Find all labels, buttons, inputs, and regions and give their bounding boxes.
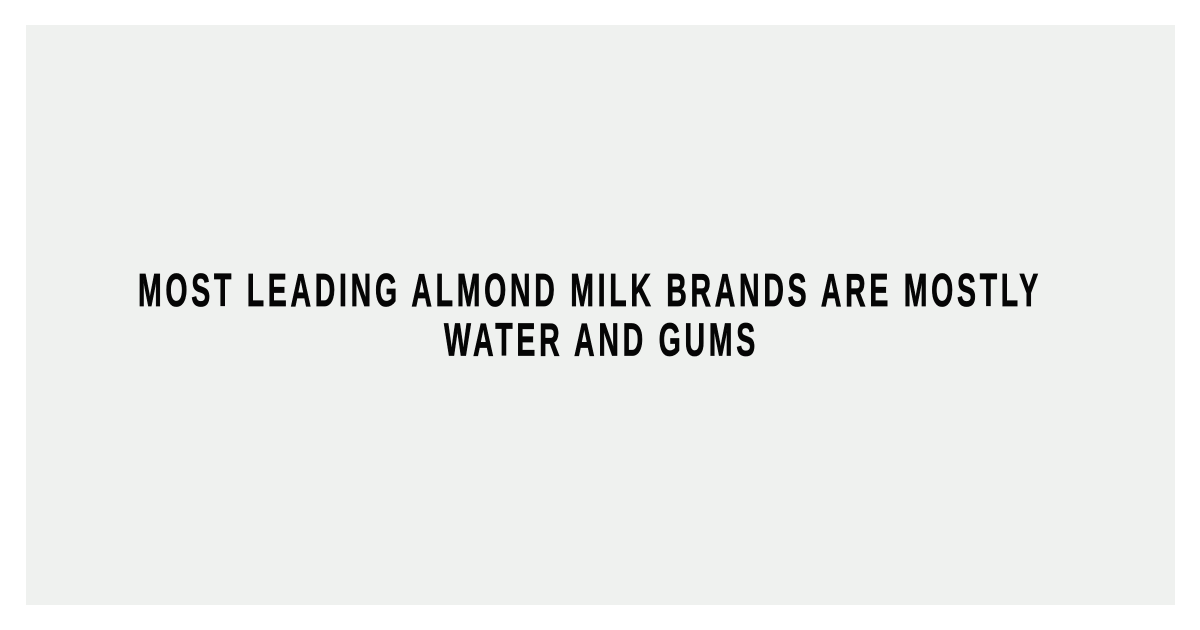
title bbox=[138, 264, 1042, 366]
title line 2: WATER AND GUMS bbox=[444, 314, 759, 366]
